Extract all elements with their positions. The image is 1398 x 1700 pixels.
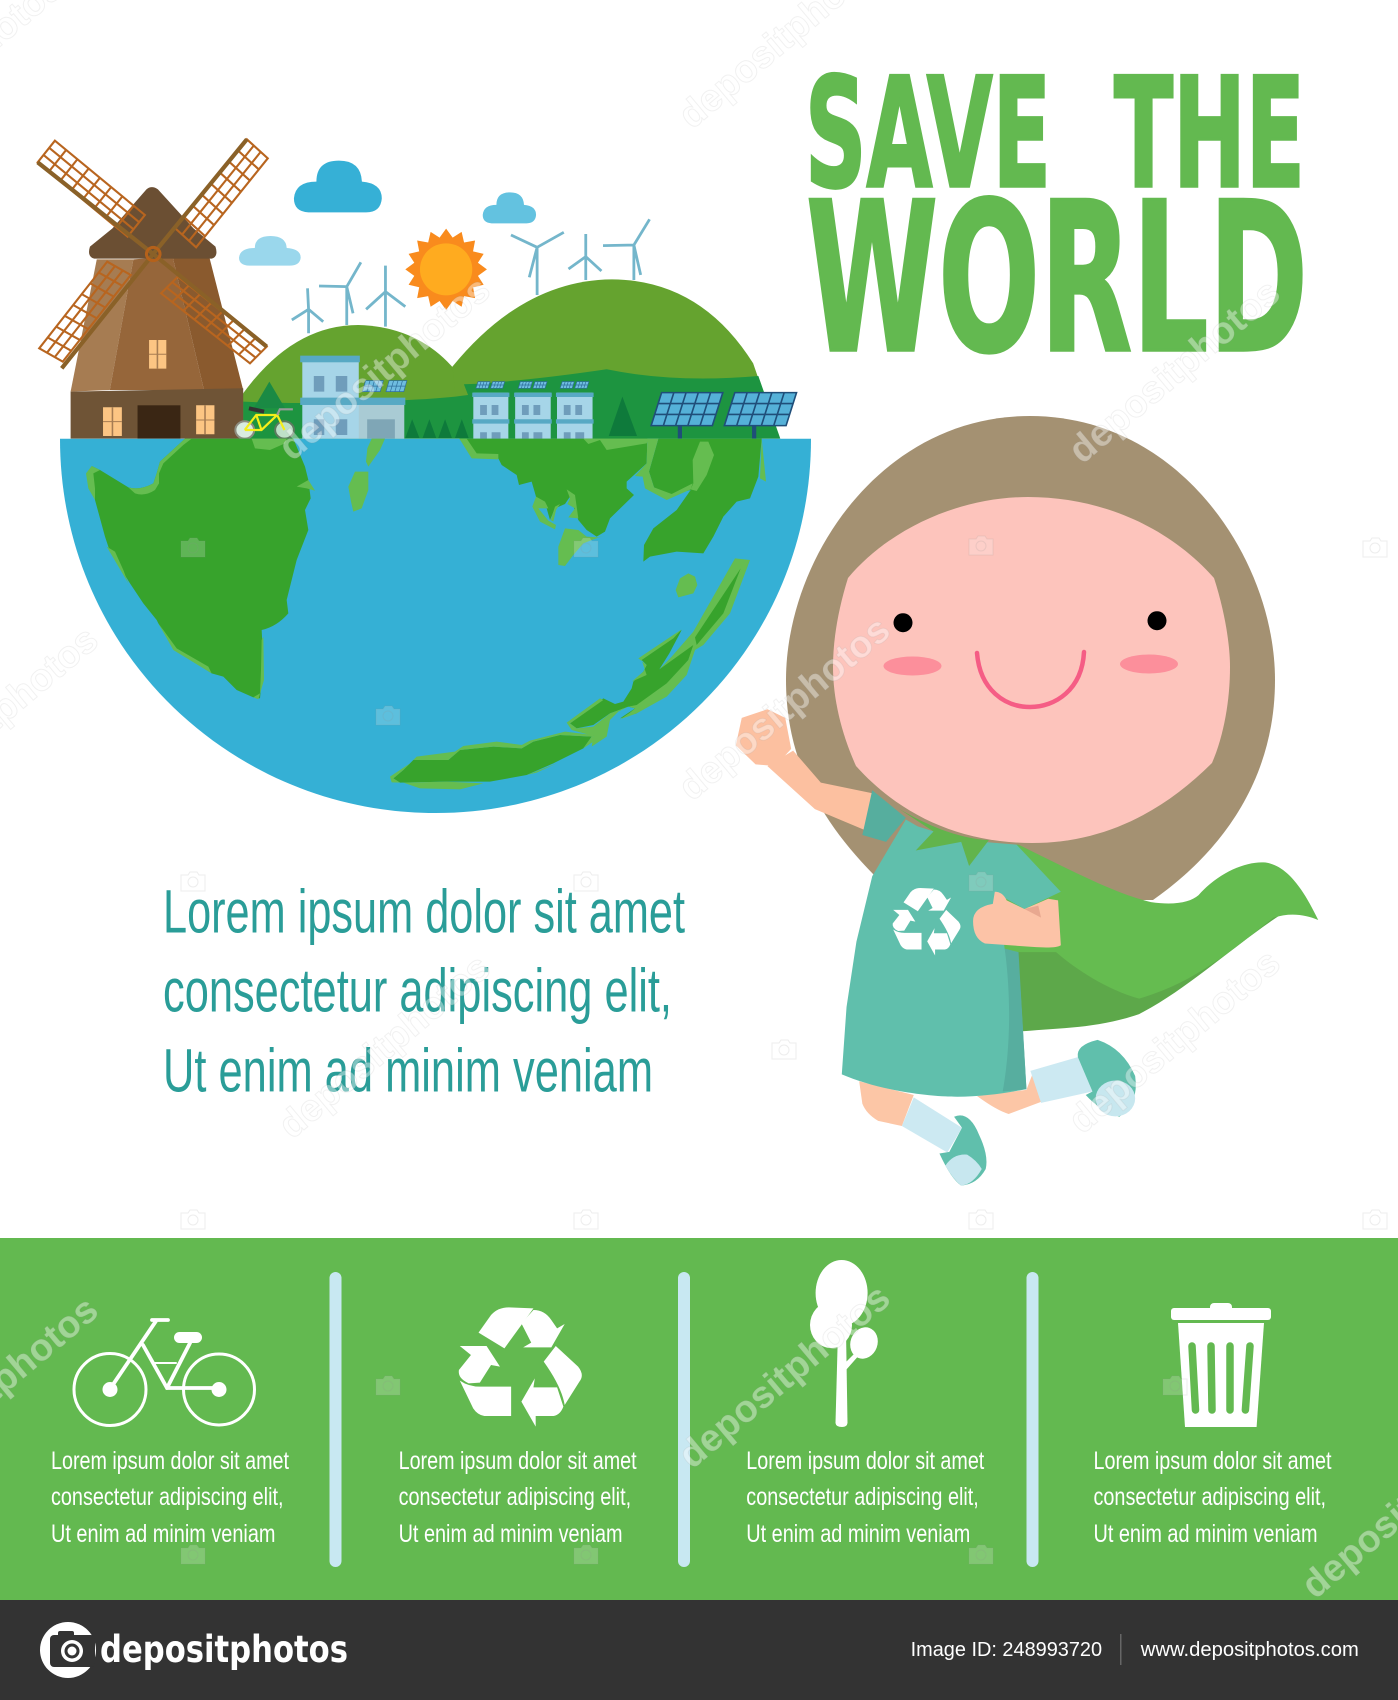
watermarks: depositphotos <box>671 1276 898 1477</box>
cheeks <box>884 654 1178 676</box>
watermarks: depositphotos <box>1061 941 1288 1142</box>
watermarks: depositphotos <box>1061 271 1288 472</box>
title: save the world: SAVE <box>805 45 1051 222</box>
windmill <box>38 139 268 439</box>
sun <box>405 229 487 310</box>
small bicycle <box>235 408 294 439</box>
logo camera mark <box>40 1622 96 1678</box>
small camera watermarks <box>181 536 1387 1564</box>
column 3 text: Lorem ipsum dolor sit amet <box>746 1447 984 1475</box>
column 3 text: consectetur adipiscing elit, <box>746 1483 979 1511</box>
column 1 text: Ut enim ad minim veniam <box>51 1520 276 1548</box>
watermarks: depositphotos <box>271 268 498 469</box>
islands: centre <box>348 439 385 512</box>
wind turbines <box>292 219 650 333</box>
ocean <box>60 439 811 813</box>
column 1 text: Lorem ipsum dolor sit amet <box>51 1447 289 1475</box>
hand on chest <box>973 892 1061 947</box>
green footer panel <box>0 1238 1398 1600</box>
main text block <box>163 878 685 1105</box>
separators <box>330 1272 1038 1567</box>
image id: Image ID: 248993720 <box>911 1639 1102 1661</box>
globe <box>60 439 811 813</box>
cloud: mid right <box>483 192 536 223</box>
front leg <box>859 1081 986 1186</box>
eyes <box>894 611 1166 632</box>
icon: trash can <box>1171 1303 1271 1427</box>
column 2 text <box>399 1447 637 1548</box>
icon: tree <box>810 1260 882 1427</box>
watermarks: depositphotos <box>671 608 898 809</box>
hair <box>786 416 1275 900</box>
continent: left <box>86 439 315 699</box>
cloud: light left <box>239 236 301 266</box>
watermarks: depositphotos <box>271 946 498 1147</box>
trees <box>254 382 637 438</box>
icon: recycle <box>459 1307 582 1427</box>
icon: bicycle <box>74 1320 254 1426</box>
main text block: consectetur adipiscing elit, <box>163 957 672 1025</box>
title: save the world <box>805 45 1308 399</box>
collar knot <box>898 808 989 866</box>
shirt recycle symbol <box>893 888 961 956</box>
logo wordmark: depositphotos <box>100 1628 348 1671</box>
girl superhero character <box>736 416 1318 1186</box>
column 3 text: Ut enim ad minim veniam <box>746 1520 970 1548</box>
column 1 text <box>51 1447 289 1548</box>
three houses <box>472 382 594 439</box>
column 4 text: consectetur adipiscing elit, <box>1094 1483 1326 1511</box>
raised arm and hand <box>736 709 874 830</box>
windmill sails <box>38 139 268 368</box>
main text block: Ut enim ad minim veniam <box>163 1037 653 1105</box>
column 3 text <box>746 1447 984 1548</box>
logo: depositphotos <box>40 1622 348 1678</box>
column 4 text: Ut enim ad minim veniam <box>1094 1520 1318 1548</box>
main text block: Lorem ipsum dolor sit amet <box>163 878 685 946</box>
island: east <box>676 573 697 597</box>
column 4 text <box>1094 1447 1332 1548</box>
website url: www.depositphotos.com <box>1140 1639 1359 1661</box>
face <box>833 497 1230 843</box>
column 2 text: Lorem ipsum dolor sit amet <box>399 1447 637 1475</box>
eco town scene on top of globe <box>38 139 797 439</box>
column 2 text: consectetur adipiscing elit, <box>399 1483 631 1511</box>
hills <box>230 279 780 439</box>
archipelago: south east <box>390 558 750 789</box>
smile <box>977 652 1084 707</box>
column 2 text: Ut enim ad minim veniam <box>399 1520 623 1548</box>
column 1 text: consectetur adipiscing elit, <box>51 1483 284 1511</box>
body with cape, arms, shirt and legs <box>736 709 1318 1186</box>
building with rooftop solar <box>300 356 407 439</box>
cape <box>997 845 1318 1031</box>
column 4 text: Lorem ipsum dolor sit amet <box>1094 1447 1332 1475</box>
shirt <box>842 790 1061 1097</box>
back leg <box>977 1040 1136 1117</box>
cloud: large blue <box>294 161 382 212</box>
dark footer bar <box>0 1600 1398 1700</box>
large solar panels <box>651 393 797 439</box>
continent: right <box>459 439 766 597</box>
